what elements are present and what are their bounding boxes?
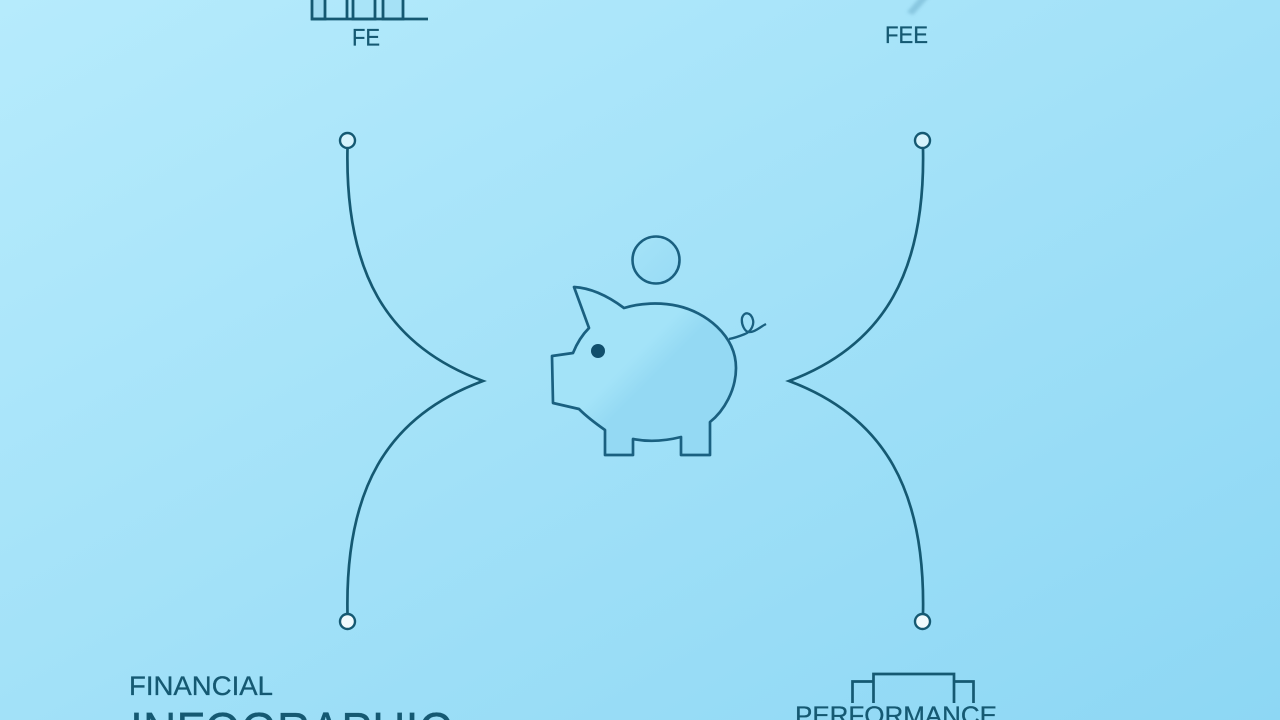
bottom-right item: bracket icon and PERFORMANCE label <box>795 674 997 720</box>
right bracket connector <box>789 133 930 629</box>
title line: FINANCIAL: FINANCIAL <box>129 671 273 701</box>
pig tail <box>729 313 766 339</box>
left bracket connector <box>340 133 483 629</box>
pig eye <box>591 344 605 358</box>
icon fragment: diagonal streak <box>907 0 930 15</box>
title <box>129 671 452 720</box>
label: FEE: FEE <box>885 22 928 49</box>
icon: bar chart <box>311 0 428 19</box>
icon: stepped bars <box>852 674 974 703</box>
icon: piggy bank with coin <box>552 236 766 455</box>
pig body <box>552 287 736 455</box>
top-left item: bar icon and FE label <box>311 0 428 52</box>
top-right item: streak and FEE label <box>885 0 930 49</box>
label: FE: FE <box>352 24 380 52</box>
coin <box>632 236 680 284</box>
